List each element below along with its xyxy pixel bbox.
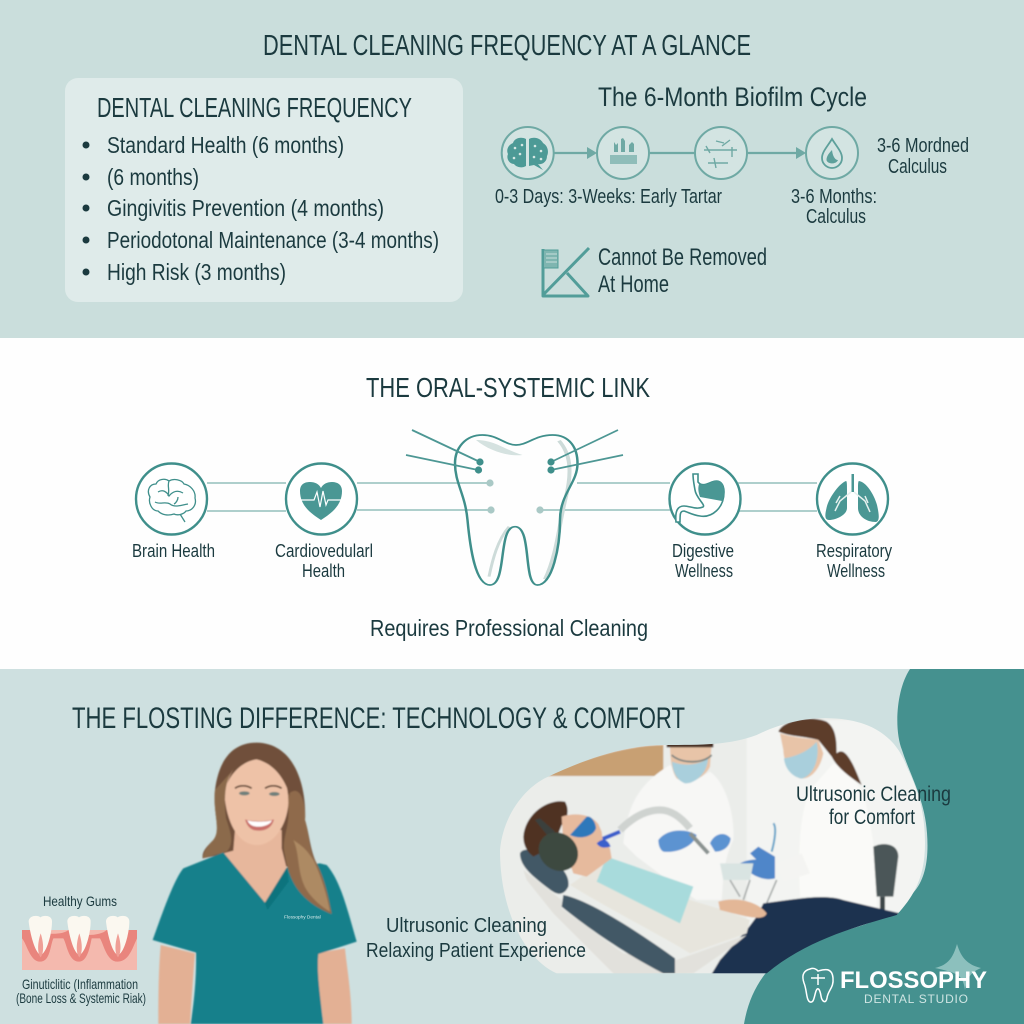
frequency list: High Risk (3 months) [107, 259, 286, 285]
panel: top band [0, 0, 1024, 338]
photo: hygienist portrait: Flossophy Dental [284, 914, 321, 919]
label: respiratory wellness: Wellness [827, 561, 885, 581]
frequency list: (6 months) [107, 164, 199, 190]
caption: requires professional cleaning: Requires Professional Cleaning [370, 615, 648, 641]
equipment [620, 810, 690, 830]
label: gingivitis: (Bone Loss & Systemic Riak) [16, 990, 146, 1006]
patient head [523, 801, 568, 857]
label: digestive wellness [672, 541, 734, 581]
label: cardiovascular health: Cardiovedularl [275, 541, 373, 561]
panel: bottom band [0, 669, 1024, 1024]
heading: flossing difference: THE FLOSTING DIFFERENCE: TECHNOLOGY & COMFORT [72, 702, 685, 735]
panel: cleaning frequency [65, 78, 463, 302]
callout: cannot be removed [598, 244, 767, 298]
biofilm cycle diagram [502, 127, 858, 179]
label: digestive wellness: Wellness [675, 561, 733, 581]
connector lines [207, 483, 817, 511]
label: gingivitis [16, 976, 146, 1006]
cycle labels: 3-6 Mordned [877, 135, 969, 157]
arrows [554, 147, 806, 159]
heading: biofilm cycle: The 6-Month Biofilm Cycle [598, 82, 867, 112]
frequency list: Gingivitis Prevention (4 months) [107, 195, 384, 221]
callout: ultrasonic cleaning for comfort: for Comfort [829, 806, 915, 829]
heading: oral-systemic link: THE ORAL-SYSTEMIC LINK [366, 372, 650, 403]
gloves [740, 847, 775, 879]
cycle labels [495, 135, 969, 228]
label: cardiovascular health [275, 541, 373, 581]
rear dentist [623, 765, 734, 900]
callout: relaxing patient experience: Ultrusonic Cleaning [386, 915, 547, 937]
icon: water drop stage [806, 127, 858, 179]
diagram: healthy gums [16, 893, 146, 1006]
icon: heart health [286, 464, 357, 534]
callout: cannot be removed: Cannot Be Removed [598, 244, 767, 271]
photo: dental treatment room [500, 718, 925, 974]
icon: tooth plaque stage [597, 127, 649, 179]
icon: lungs [817, 464, 888, 534]
chair [523, 870, 747, 977]
photo: hygienist portrait [153, 743, 357, 1024]
spikes [406, 430, 623, 474]
cycle labels: 0-3 Days: 3-Weeks: Early Tartar [495, 186, 722, 208]
frequency list: Standard Health (6 months) [107, 132, 344, 158]
pants [710, 897, 900, 977]
panel heading: DENTAL CLEANING FREQUENCY [97, 92, 412, 123]
central tooth [406, 430, 623, 585]
label: brain health: Brain Health [132, 541, 215, 561]
gum illustration [22, 916, 137, 970]
panel: oral-systemic band [0, 338, 1024, 669]
logo: flossophy dental studio [803, 944, 987, 1006]
cycle labels: Calculus [888, 156, 947, 178]
callout: ultrasonic cleaning for comfort [796, 783, 951, 829]
label: healthy gums: Healthy Gums [43, 893, 117, 909]
frequency list [82, 132, 439, 285]
logo: flossophy dental studio: DENTAL STUDIO [864, 992, 968, 1006]
callout: ultrasonic cleaning for comfort: Ultrusonic Cleaning [796, 783, 951, 806]
icon: microbe stage [695, 127, 747, 179]
frequency list: Periodotonal Maintenance (3-4 months) [107, 227, 439, 253]
logo: flossophy dental studio: FLOSSOPHY [840, 967, 987, 994]
front dentist [799, 763, 877, 910]
title: DENTAL CLEANING FREQUENCY AT A GLANCE [263, 30, 751, 62]
label: cardiovascular health: Health [302, 561, 345, 581]
label: gingivitis: Ginuticlitic (Inflammation [22, 976, 138, 992]
cycle labels: Calculus [806, 206, 866, 228]
label: respiratory wellness: Respiratory [816, 541, 892, 561]
callout: relaxing patient experience: Relaxing Patient Experience [366, 940, 586, 962]
cycle labels: 3-6 Months: [791, 186, 877, 208]
label: digestive wellness: Digestive [672, 541, 734, 561]
patient body [570, 860, 750, 953]
icon: crossed-out toothbrush [543, 248, 589, 296]
icon: brain stage [502, 127, 554, 179]
icon: brain health [136, 464, 207, 534]
teal corner blob [744, 669, 1024, 1024]
label: respiratory wellness [816, 541, 892, 581]
icon: stomach [670, 464, 740, 534]
callout: relaxing patient experience [366, 915, 586, 962]
callout: cannot be removed: At Home [598, 271, 669, 298]
